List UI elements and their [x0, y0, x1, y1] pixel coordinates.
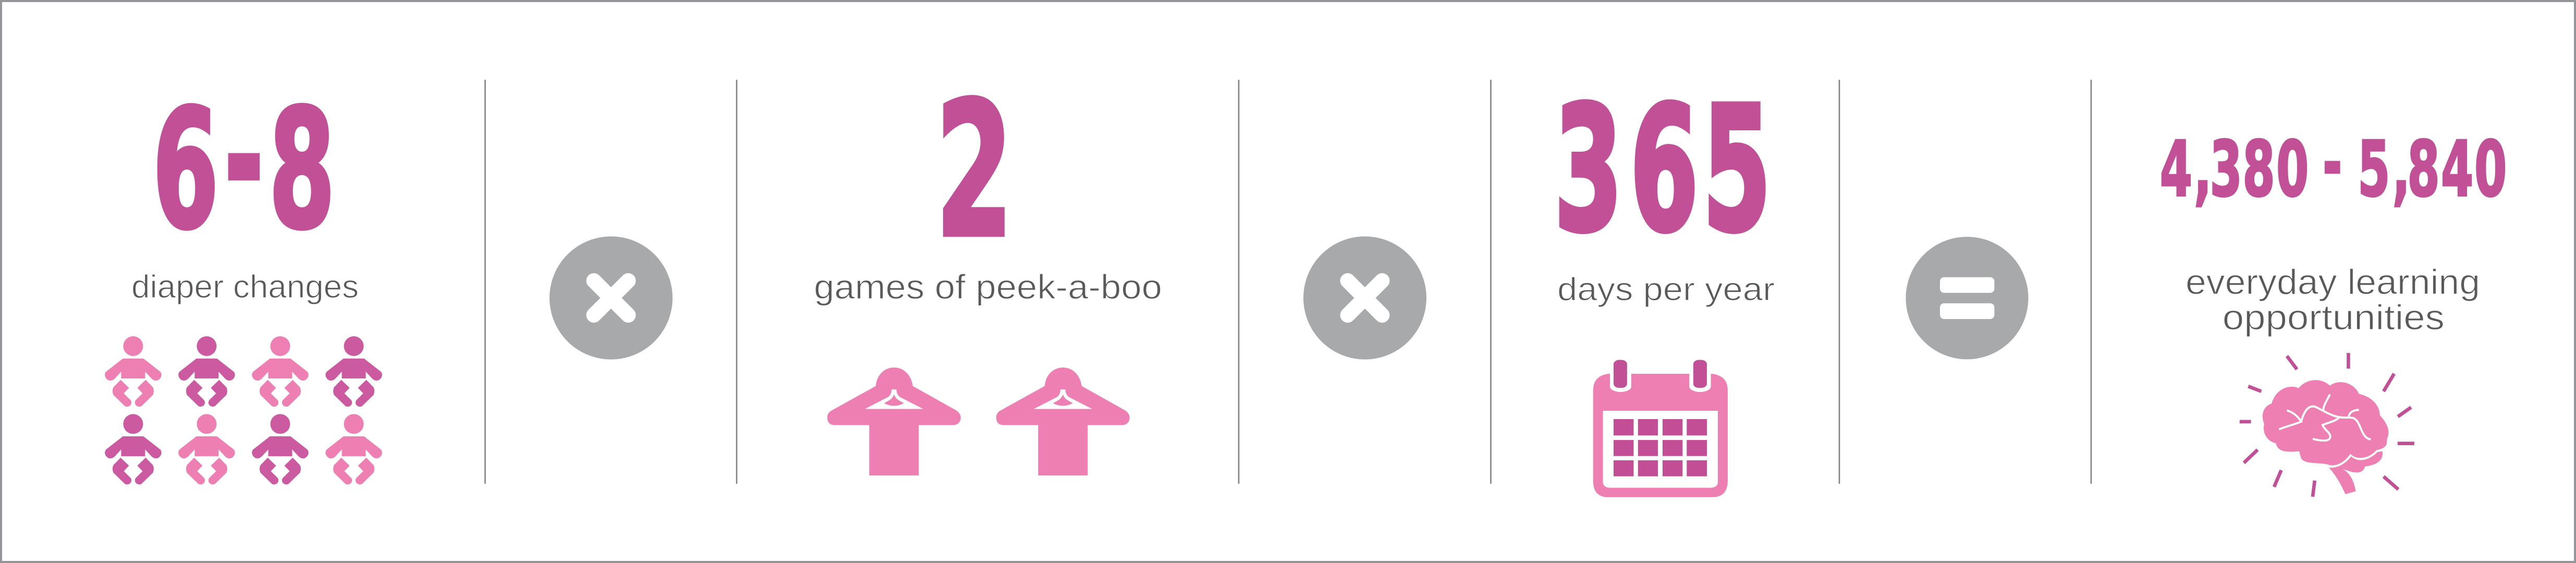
number: 6-8: 6-8	[153, 62, 335, 265]
panel: diaper changes	[105, 62, 382, 484]
icon: calendar	[1593, 360, 1728, 497]
icon: equals sign	[1906, 237, 2028, 359]
icons: eight babies	[105, 336, 382, 484]
divider lines	[484, 80, 2092, 484]
number: 365: 365	[1554, 70, 1771, 270]
number: 2: 2	[935, 64, 1013, 279]
label: everyday learning opportunities: opportunities	[2223, 298, 2445, 337]
panel: games of peek-a-boo	[814, 64, 1162, 475]
label: diaper changes: diaper changes	[131, 269, 359, 305]
label: games of peek-a-boo: games of peek-a-boo	[814, 267, 1162, 306]
icon: brain with rays	[2240, 353, 2414, 497]
icon: multiply sign	[550, 237, 673, 360]
label: everyday learning opportunities	[2186, 262, 2480, 337]
panel: days per year	[1554, 70, 1775, 497]
number: 4,380 - 5,840: 4,380 - 5,840	[2160, 119, 2507, 214]
icon: multiply sign	[1303, 237, 1426, 360]
icons: two peek-a-boo figures	[827, 368, 1130, 475]
label: everyday learning opportunities: everyday learning	[2186, 262, 2480, 302]
label: days per year: days per year	[1557, 272, 1775, 308]
panel: everyday learning opportunities	[2160, 119, 2507, 497]
